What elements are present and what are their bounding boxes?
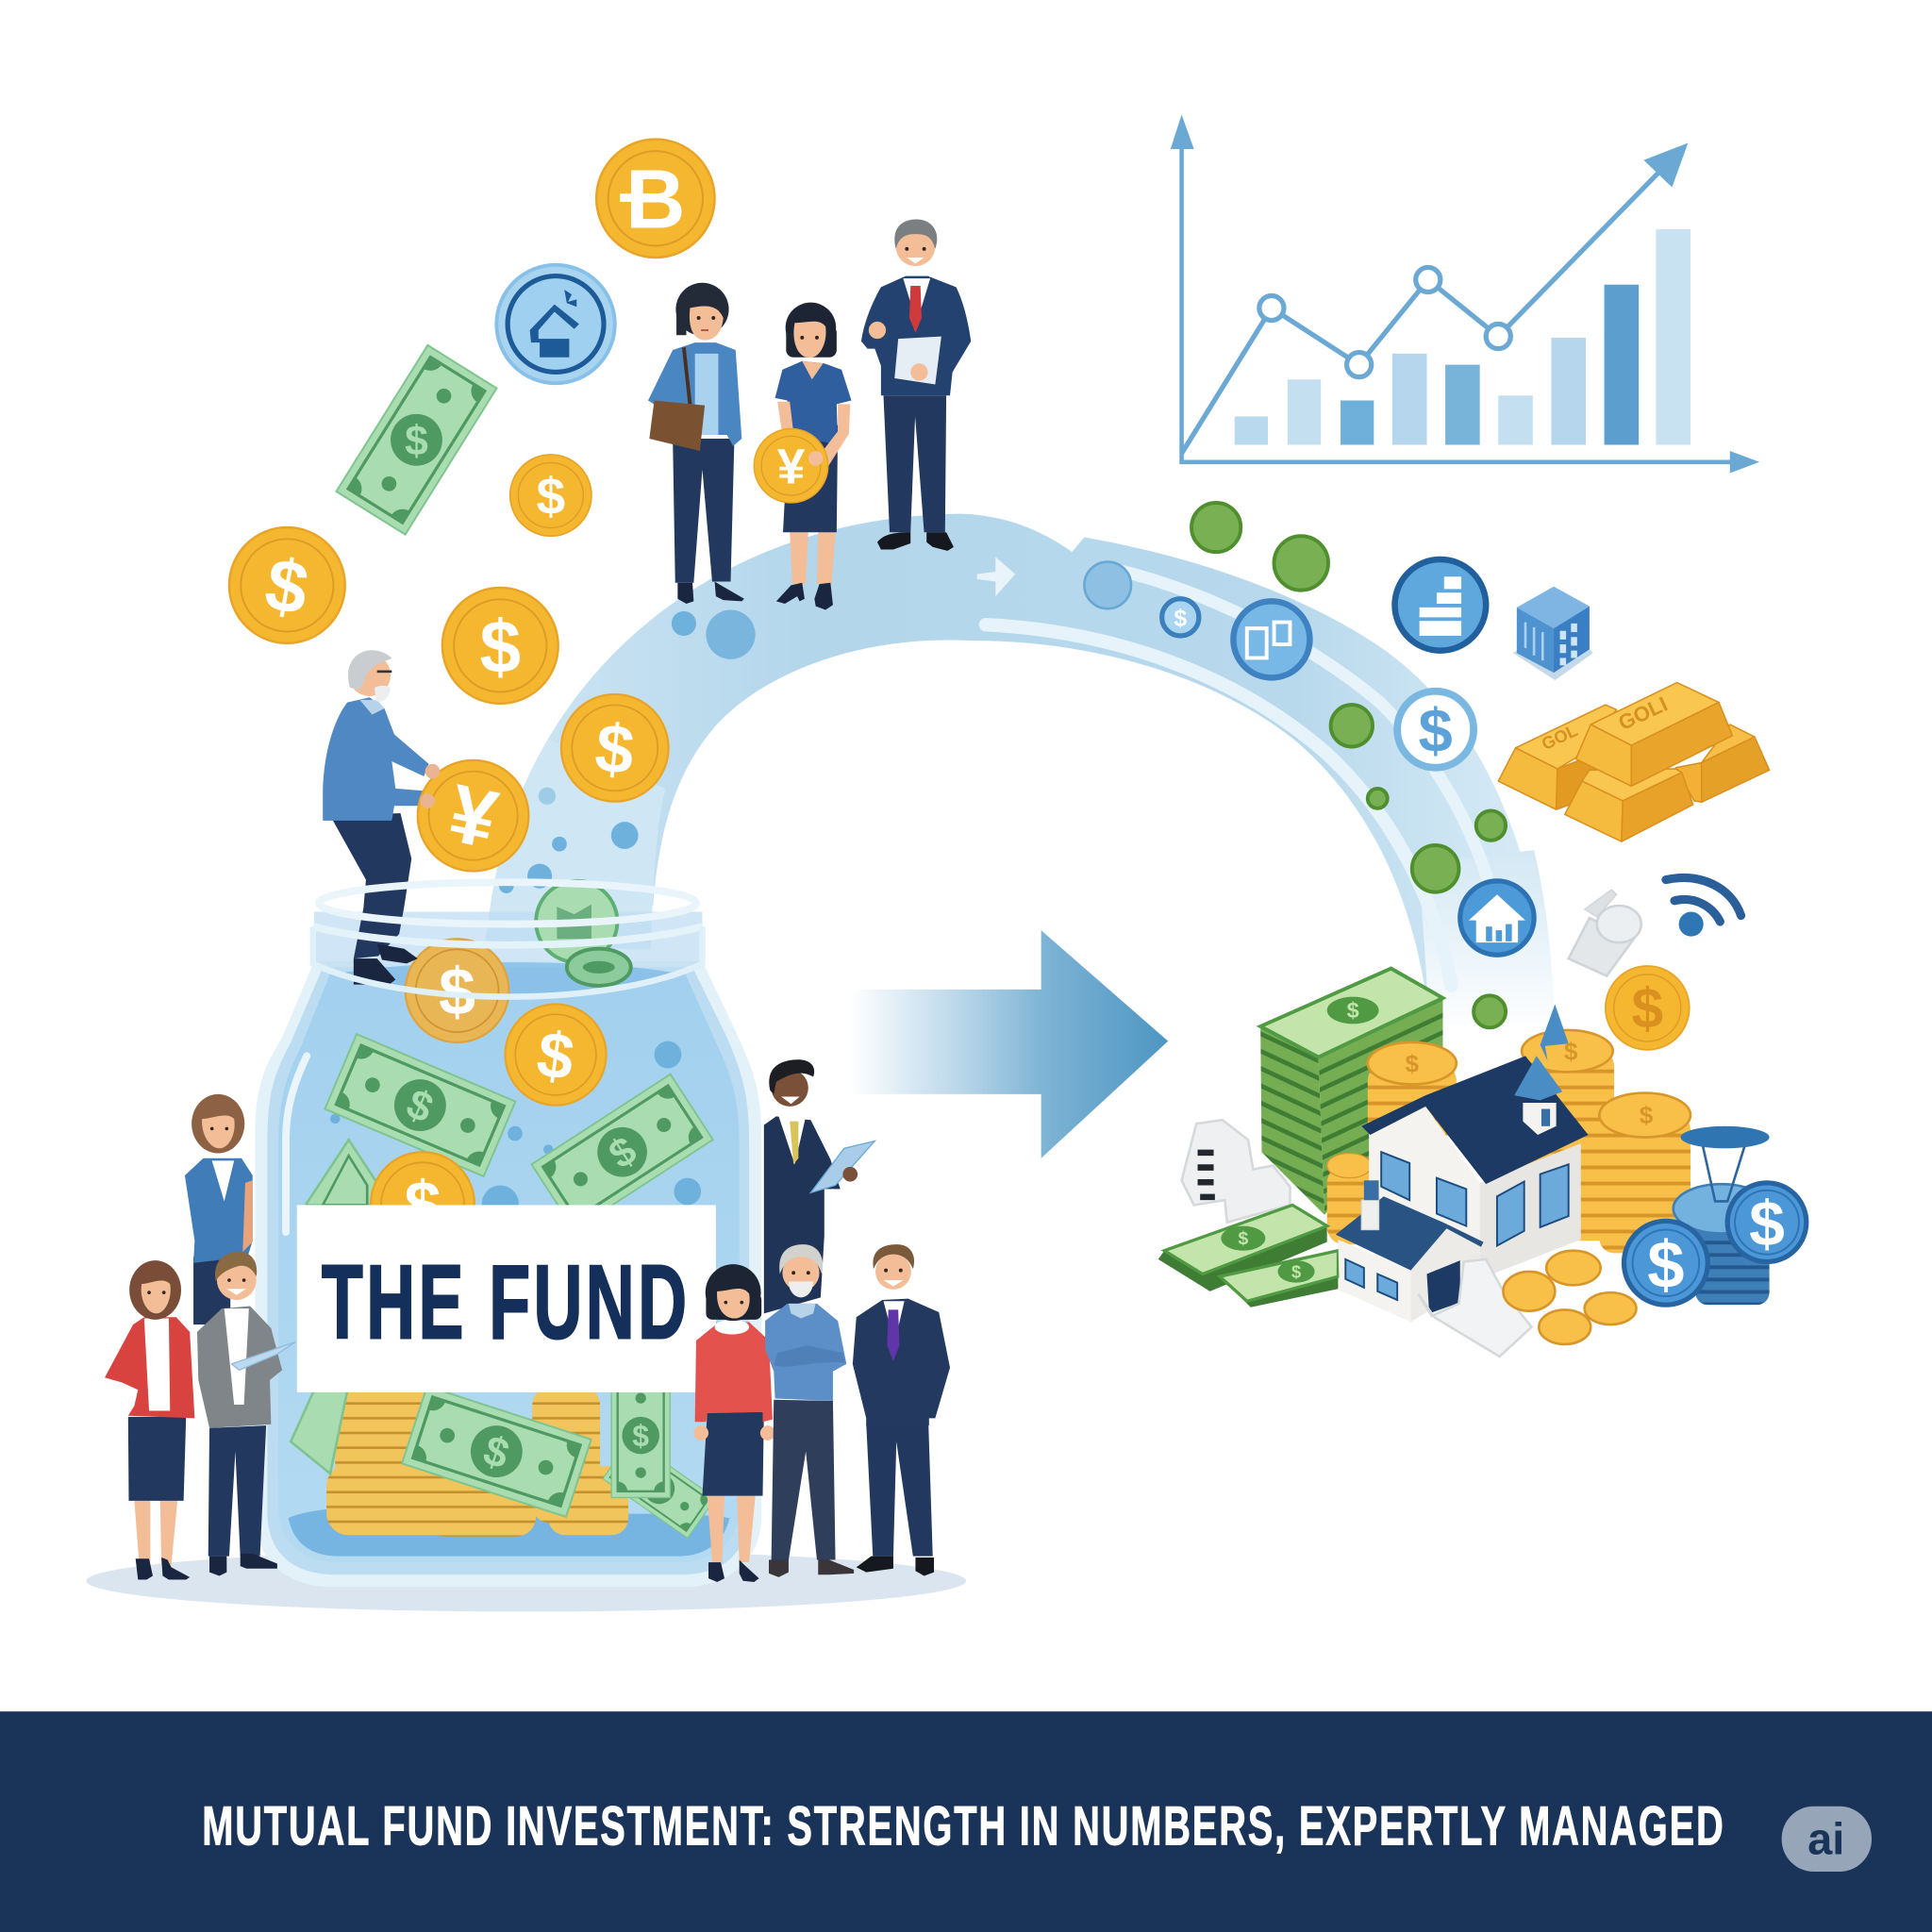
dormer cap (1514, 1056, 1562, 1100)
dollar ring badge: $ (1418, 696, 1453, 765)
chart axes (1171, 114, 1759, 474)
notes at jar neck (536, 881, 631, 986)
front bar (1565, 769, 1693, 841)
person: woman with shoulder bag (648, 283, 744, 604)
coin stack behind house (1522, 1030, 1614, 1241)
icon: silver canister (1569, 890, 1641, 975)
line and bar chart (1171, 114, 1759, 474)
blue coin stack (1674, 1126, 1770, 1305)
bubbles (330, 1041, 701, 1223)
money tower (1260, 969, 1442, 1215)
coin: dollar left: $ (259, 542, 314, 631)
glass jar (255, 912, 761, 1587)
person: older man with crossed arms (765, 1244, 854, 1577)
asset pile (1158, 969, 1807, 1357)
coin: B (596, 140, 715, 258)
person: man in suit with purple tie (853, 1244, 950, 1576)
jar water (278, 974, 740, 1562)
small gold coins (1503, 1251, 1637, 1344)
coin: gold dollar (1606, 966, 1690, 1050)
glass jar: $ (478, 1427, 515, 1478)
coin stack right: $ (1640, 1101, 1654, 1129)
coin: dollar on arc: $ (591, 709, 638, 790)
green token (1191, 503, 1506, 1027)
coin: gold dollar: $ (1631, 976, 1663, 1041)
top bar: GOLI (1615, 691, 1671, 735)
gadget badge (1233, 601, 1309, 677)
person: man with tablet right (764, 1059, 874, 1313)
coin: dollar small: $ (536, 467, 565, 525)
coin: dollar center (442, 588, 558, 704)
right bar (1675, 724, 1770, 802)
main house (1361, 1004, 1589, 1279)
person: man in suit with red tie (861, 219, 971, 551)
notes on coin piles (291, 1390, 347, 1474)
coin stack lower left (1327, 1154, 1389, 1244)
shoes (354, 943, 418, 985)
partly hidden coin (371, 1152, 475, 1256)
coin stack left back (1368, 1042, 1457, 1138)
person: man in gray blazer with tablet (197, 1252, 295, 1576)
banknote: flying (329, 339, 504, 541)
banknote: flying: $ (405, 418, 428, 464)
blue coin left: $ (1647, 1227, 1684, 1302)
top bar (1576, 683, 1732, 786)
yen coin carried (418, 760, 528, 871)
flat bills (1158, 1205, 1338, 1307)
partly hidden coin: $ (404, 1167, 441, 1241)
coin: dollar small (510, 455, 591, 536)
yen coin held: ¥ (777, 440, 806, 495)
sweater (323, 697, 429, 821)
person: woman in red sweater (693, 1264, 775, 1582)
coin stack left back: $ (1406, 1049, 1420, 1077)
person: woman in red jacket (105, 1260, 194, 1579)
roof spike (1541, 1004, 1569, 1061)
money tower: $ (1347, 998, 1359, 1023)
fund label (297, 1205, 716, 1392)
label text: THE FUND (322, 1242, 690, 1360)
coin: dollar left (229, 527, 345, 643)
big arrow (850, 930, 1168, 1158)
ai badge: ai (1807, 1814, 1844, 1864)
flat bills: $ (1238, 1228, 1248, 1249)
flow arc from jar to assets (484, 514, 1555, 1023)
legs (330, 813, 411, 958)
small arrow mark (977, 557, 1015, 596)
blue coin right (1727, 1183, 1807, 1261)
yen coin held (754, 429, 828, 503)
blue coin right: $ (1749, 1189, 1785, 1259)
gold bars (1498, 683, 1770, 841)
flat bills: $ (1291, 1261, 1301, 1281)
coin: dollar in jar neck: $ (439, 954, 475, 1028)
left bar (1498, 705, 1617, 809)
pale bubble token (1084, 562, 1131, 608)
white figurine (1182, 1120, 1291, 1223)
person: woman in blue jacket behind (185, 1094, 253, 1324)
ai badge (1782, 1807, 1872, 1872)
coin: dollar in jar neck (406, 939, 508, 1042)
gold coin piles (326, 1388, 628, 1537)
rising trend line (1182, 143, 1688, 454)
small dollar token: $ (1174, 607, 1187, 632)
droplets in the arc (499, 610, 756, 893)
light streaks in the arc (986, 569, 1497, 986)
small dollar token (1162, 599, 1199, 636)
glass jar: $ (601, 1127, 644, 1178)
icon: office building (1513, 587, 1593, 680)
coin in jar: $ (533, 1017, 578, 1094)
coin stack right (1599, 1093, 1690, 1253)
person: woman holding yen coin (754, 303, 852, 610)
icon: blue house badge (496, 265, 615, 383)
jar body (255, 961, 761, 1587)
small house (1336, 1180, 1484, 1322)
coin stack behind house: $ (1564, 1037, 1578, 1065)
left bar: GOL (1539, 720, 1580, 754)
yen coin carried: ¥ (441, 767, 505, 866)
blue coin left (1624, 1221, 1707, 1305)
jar rim (313, 882, 702, 997)
stacked blocks badge (1395, 559, 1486, 651)
person: older man placing yen coin (323, 650, 528, 985)
ground shadow (86, 1550, 966, 1611)
house badge (1460, 881, 1534, 955)
white chair (1418, 1259, 1532, 1357)
coin: B: B (625, 154, 686, 246)
jar neck fill (314, 912, 702, 998)
falling notes in jar (319, 1027, 522, 1183)
coin: dollar on arc (561, 694, 669, 802)
coin in jar (506, 1004, 607, 1106)
falling notes in jar: $ (400, 1080, 440, 1132)
coin: dollar center: $ (479, 606, 521, 689)
footer band (0, 1711, 1932, 1932)
jar glare (286, 1056, 307, 1232)
chart bars (1235, 229, 1690, 445)
glass jar: $ (632, 1419, 649, 1453)
dollar ring badge (1397, 691, 1474, 768)
icon: wifi waves (1666, 878, 1741, 937)
flow tokens on arc (1084, 503, 1534, 1027)
